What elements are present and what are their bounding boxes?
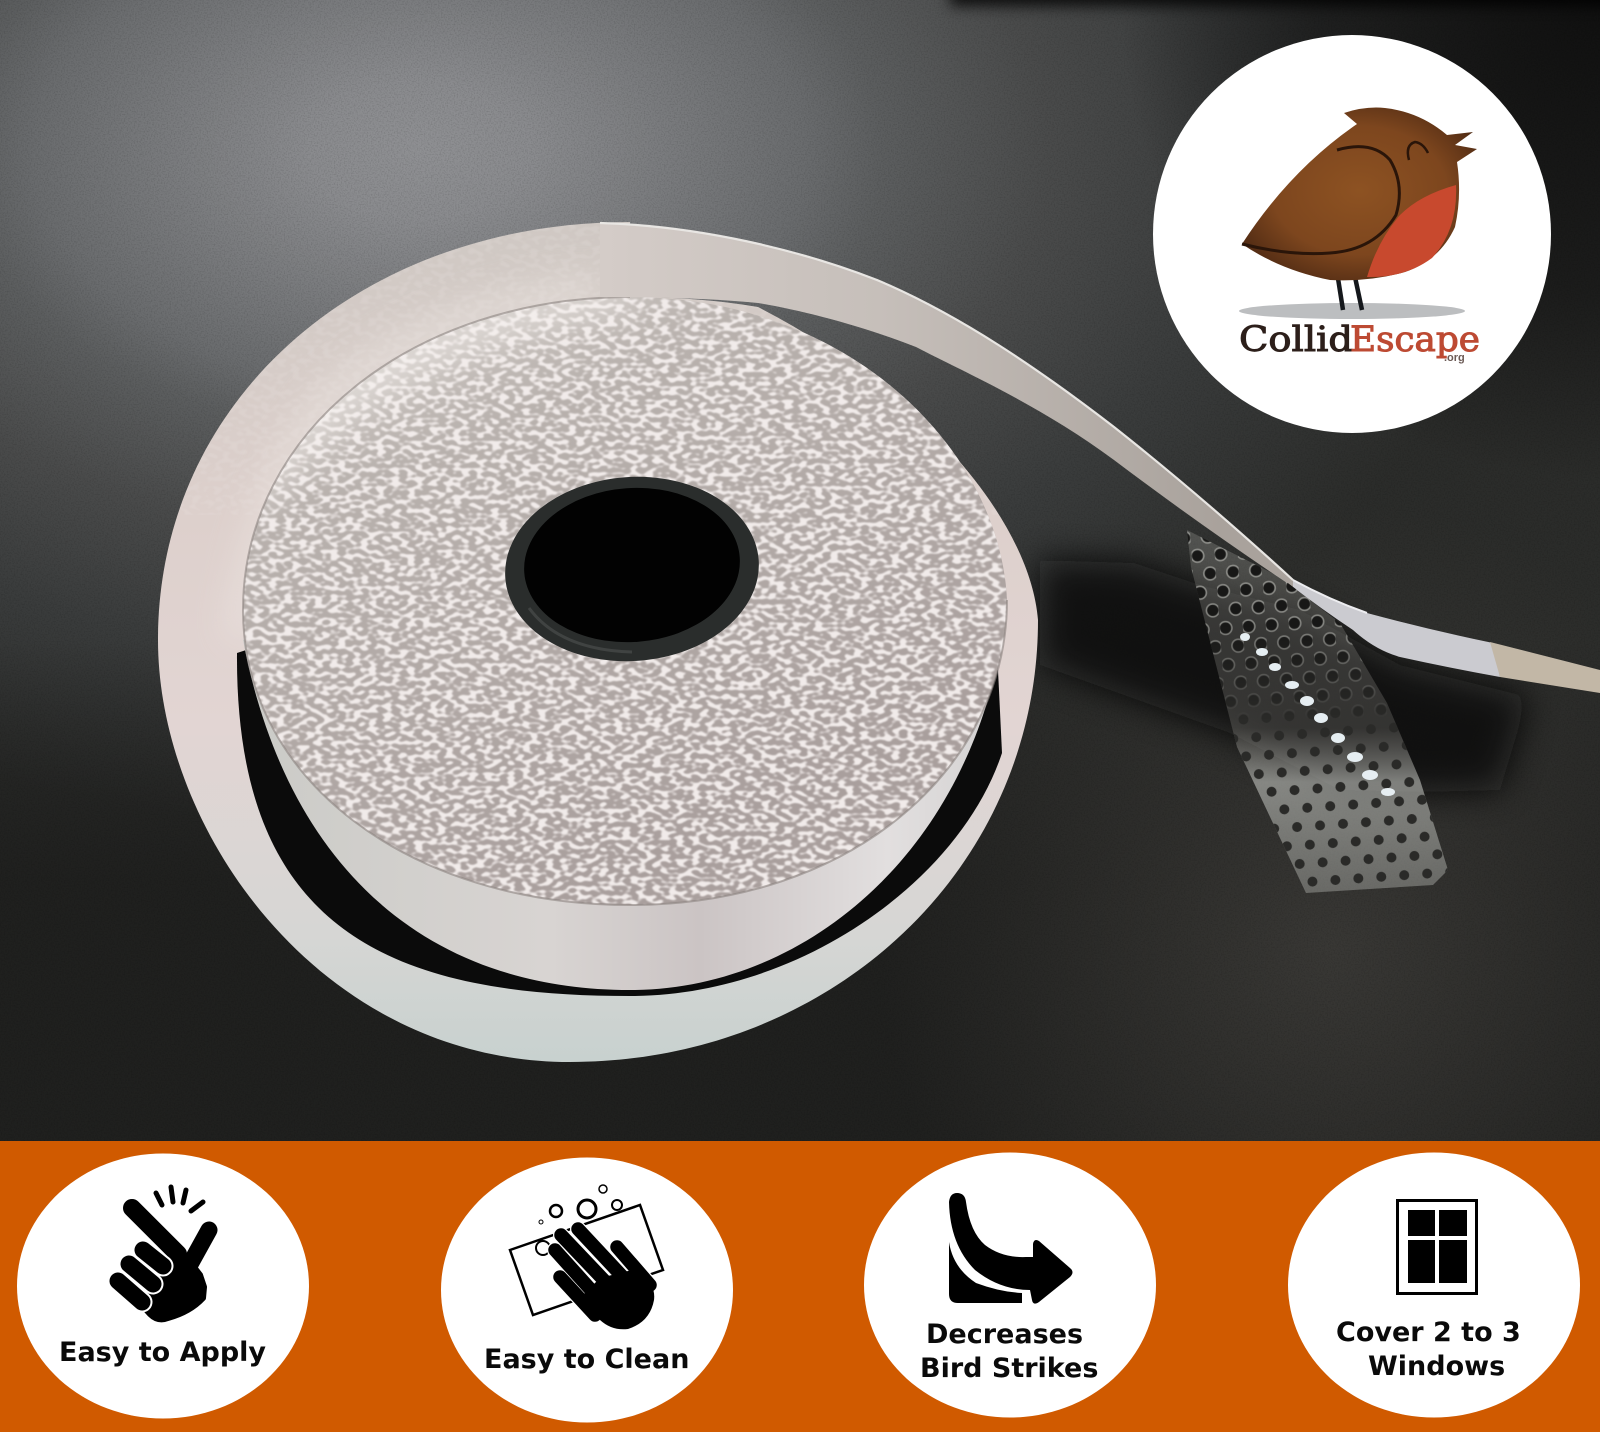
roll top face with pattern bbox=[230, 280, 1020, 910]
roll side wall bbox=[243, 560, 1000, 990]
bright reflected holes bbox=[1240, 633, 1395, 796]
icon: finger snap bbox=[118, 1187, 209, 1319]
feature: easy to apply bbox=[17, 1154, 309, 1418]
wing line bbox=[1242, 147, 1399, 254]
label: Bird Strikes bbox=[920, 1353, 1098, 1384]
icon: deflected arrow bbox=[949, 1193, 1072, 1304]
label: Easy to Apply bbox=[59, 1337, 266, 1368]
roll centre hole bbox=[499, 468, 765, 670]
logo wordmark: .org bbox=[1444, 352, 1465, 364]
label: Windows bbox=[1368, 1351, 1505, 1382]
logo wordmark: Collid bbox=[1239, 320, 1353, 360]
transparent perforated film bbox=[1180, 525, 1460, 900]
photo: tape roll on dark surface bbox=[0, 0, 1600, 1145]
icon: window bbox=[1398, 1200, 1476, 1294]
label: Easy to Clean bbox=[484, 1344, 689, 1375]
icon: robin bird bbox=[1239, 108, 1477, 319]
ground shadow bbox=[1239, 303, 1465, 319]
red breast bbox=[1367, 185, 1456, 277]
logo wordmark bbox=[1239, 320, 1480, 364]
tape strip leaving the roll bbox=[600, 223, 1600, 693]
dark gap between ring and roll bbox=[237, 600, 1002, 996]
orange feature band bbox=[0, 1141, 1600, 1432]
label: Cover 2 to 3 bbox=[1336, 1317, 1521, 1348]
legs bbox=[1337, 272, 1362, 310]
logo badge bbox=[1153, 35, 1551, 433]
background surface bbox=[0, 0, 1600, 1145]
eye bbox=[1408, 142, 1428, 160]
feature: easy to clean bbox=[441, 1158, 733, 1422]
icon: hand wiping with bubbles bbox=[510, 1185, 663, 1329]
logo wordmark: Escape bbox=[1350, 320, 1480, 360]
feature: decreases bird strikes bbox=[864, 1152, 1156, 1418]
feature: cover windows bbox=[1288, 1152, 1580, 1418]
loose outer tape ring bbox=[150, 215, 1050, 1062]
body bbox=[1242, 108, 1477, 280]
label: Decreases bbox=[926, 1319, 1083, 1350]
cast shadow beneath tape strip bbox=[1040, 560, 1528, 792]
